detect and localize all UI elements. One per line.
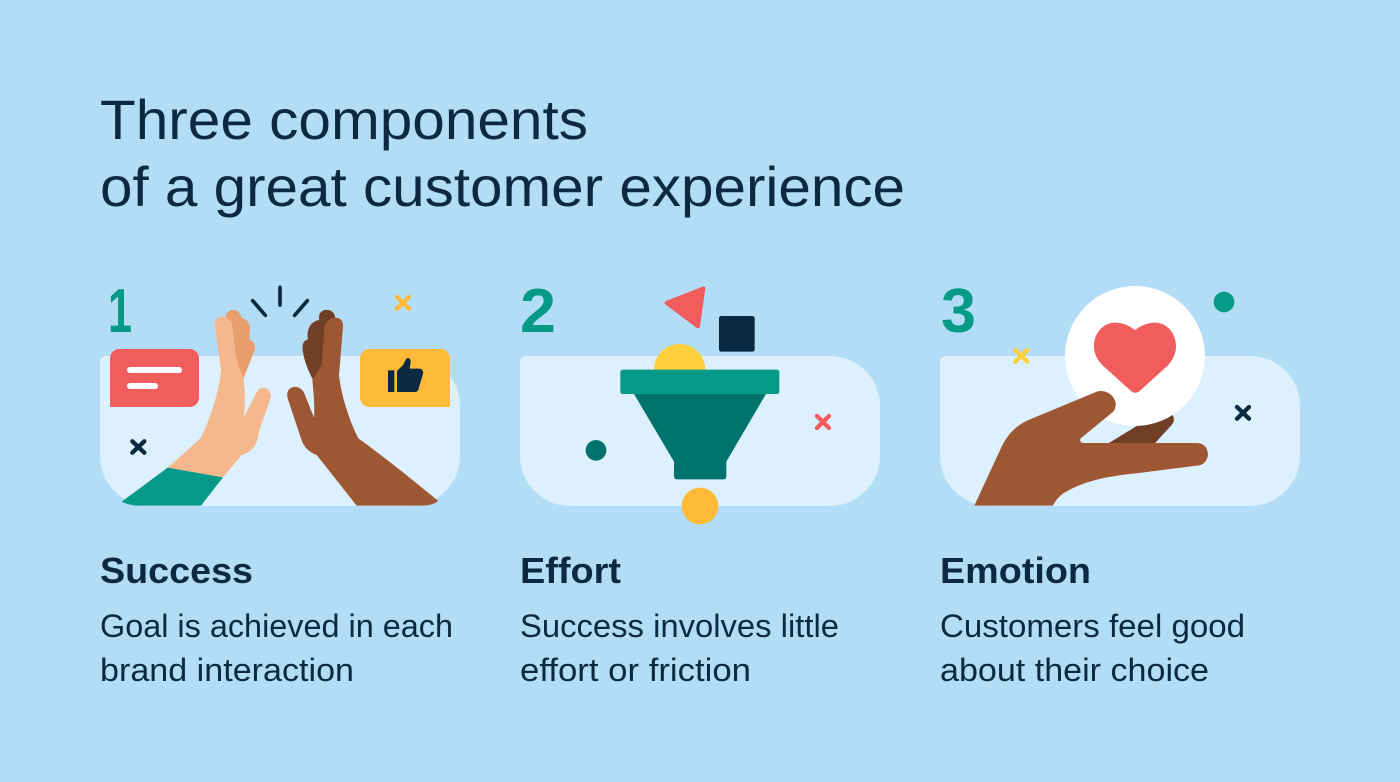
number 3: 3 bbox=[941, 277, 976, 346]
white circle bbox=[1065, 286, 1205, 426]
heading: emotion: Emotion bbox=[940, 550, 1091, 591]
icon: heart bbox=[1094, 323, 1176, 393]
dark hand bbox=[287, 310, 438, 506]
title bbox=[100, 88, 905, 218]
panel: success bbox=[100, 277, 460, 688]
yellow ball above funnel bbox=[654, 344, 705, 395]
title: of a great customer experience bbox=[100, 155, 905, 218]
heading: success: Success bbox=[100, 550, 253, 591]
illustration: funnel bbox=[586, 286, 829, 524]
panel: effort bbox=[520, 277, 880, 688]
x mark navy bbox=[132, 441, 144, 453]
illustration: hand holding heart bbox=[974, 286, 1249, 506]
description: emotion bbox=[940, 608, 1245, 688]
icon: speech bubble bbox=[110, 349, 199, 407]
description: success: brand interaction bbox=[100, 652, 354, 688]
funnel body bbox=[633, 392, 767, 479]
heading: effort: Effort bbox=[520, 550, 621, 591]
icon: thumbs up bubble bbox=[360, 349, 450, 407]
number 2: 2 bbox=[520, 277, 556, 346]
funnel rim bbox=[620, 370, 779, 394]
description: emotion: Customers feel good bbox=[940, 608, 1245, 644]
description: effort: effort or friction bbox=[520, 652, 751, 688]
panel: emotion bbox=[940, 277, 1300, 688]
description: effort bbox=[520, 608, 839, 688]
teal dot bbox=[1214, 292, 1234, 312]
icon: clap lines bbox=[253, 287, 307, 315]
x mark red bbox=[817, 416, 829, 428]
description: success bbox=[100, 608, 453, 688]
panel background bbox=[520, 356, 880, 506]
light hand bbox=[122, 310, 271, 506]
illustration: high five bbox=[110, 287, 450, 506]
navy square bbox=[719, 316, 755, 352]
red triangle bbox=[665, 286, 705, 328]
panel background bbox=[100, 356, 460, 506]
description: effort: Success involves little bbox=[520, 608, 839, 644]
x mark navy bbox=[1237, 407, 1249, 419]
panel background bbox=[940, 356, 1300, 506]
description: emotion: about their choice bbox=[940, 652, 1209, 688]
description: success: Goal is achieved in each bbox=[100, 608, 453, 644]
number 1: 1 bbox=[108, 277, 132, 346]
x mark yellow bbox=[1015, 350, 1027, 362]
x mark yellow bbox=[397, 297, 409, 309]
hand bbox=[974, 391, 1208, 506]
back finger bbox=[1108, 410, 1174, 445]
title: Three components bbox=[100, 88, 588, 151]
yellow ball below funnel bbox=[682, 488, 718, 524]
teal dot bbox=[586, 440, 606, 461]
